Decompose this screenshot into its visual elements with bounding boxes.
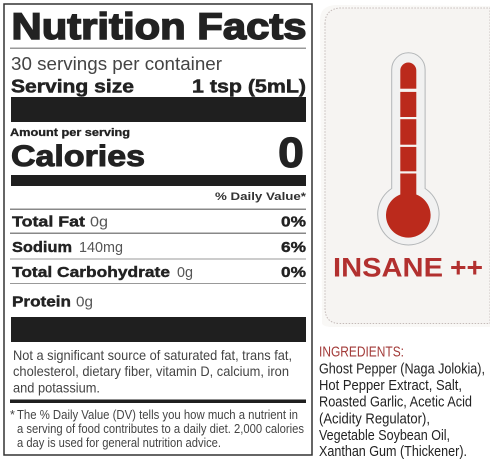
row: protein: 0g xyxy=(76,294,93,310)
serving size: 1 tsp (5mL) xyxy=(192,76,306,96)
panel: heat level card xyxy=(320,5,490,327)
footnote: The % Daily Value (DV) tells you how much a nutrient in xyxy=(17,408,298,422)
thick bar lower xyxy=(11,317,306,342)
daily value header: % Daily Value* xyxy=(215,191,307,203)
ingredients list: Hot Pepper Extract, Salt, xyxy=(319,378,462,394)
ingredients list: (Acidity Regulator), xyxy=(319,411,430,427)
heat level label xyxy=(333,253,483,283)
row: total carbohydrate xyxy=(12,264,306,281)
panel: nutrition facts label xyxy=(4,4,312,455)
servings per container: 30 servings per container xyxy=(11,54,222,74)
row: protein: Protein xyxy=(12,294,71,310)
row: sodium: Sodium xyxy=(12,239,72,256)
row: protein xyxy=(12,294,93,310)
calories: Calories xyxy=(11,140,145,173)
note: not a significant source: and potassium. xyxy=(13,380,100,396)
ingredients list: Roasted Garlic, Acetic Acid xyxy=(319,395,472,411)
footnote: * xyxy=(10,408,15,422)
row: total carbohydrate: Total Carbohydrate xyxy=(12,264,170,281)
note: not a significant source: cholesterol, dietary fiber, vitamin D, calcium, iron xyxy=(13,363,289,379)
row: total fat: 0g xyxy=(90,214,108,230)
ingredients heading: INGREDIENTS: xyxy=(319,344,404,360)
row: total carbohydrate: 0% xyxy=(281,264,306,281)
row: total fat xyxy=(12,214,306,230)
row: sodium xyxy=(12,239,306,256)
heat level label: ++ xyxy=(450,253,483,283)
amount per serving: Amount per serving xyxy=(10,127,130,139)
row: total carbohydrate: 0g xyxy=(177,264,193,281)
note: not a significant source: Not a significant source of saturated fat, trans fat, xyxy=(13,347,292,363)
serving size: Serving size xyxy=(11,76,134,96)
title: Nutrition Facts xyxy=(12,6,306,47)
row: total fat: 0% xyxy=(281,214,306,230)
ingredients list: Xanthan Gum (Thickener). xyxy=(319,444,467,460)
serving size xyxy=(11,76,306,96)
calories: 0 xyxy=(278,129,304,177)
note: not a significant source xyxy=(13,347,292,396)
footnote xyxy=(10,408,304,450)
row: sodium: 140mg xyxy=(79,239,123,256)
heat level label: INSANE xyxy=(333,253,443,283)
row: sodium: 6% xyxy=(281,239,306,256)
calories xyxy=(11,129,304,177)
medium bar xyxy=(11,175,306,186)
ingredients block xyxy=(319,344,485,460)
thick bar xyxy=(11,97,306,122)
ingredients list xyxy=(319,361,485,460)
row: total fat: Total Fat xyxy=(12,214,85,230)
ingredients list: Vegetable Soybean Oil, xyxy=(319,428,450,444)
icon: thermometer xyxy=(378,53,439,245)
footnote: a serving of food contributes to a daily diet. 2,000 calories xyxy=(17,422,304,436)
footnote: a day is used for general nutrition advice. xyxy=(17,436,221,450)
